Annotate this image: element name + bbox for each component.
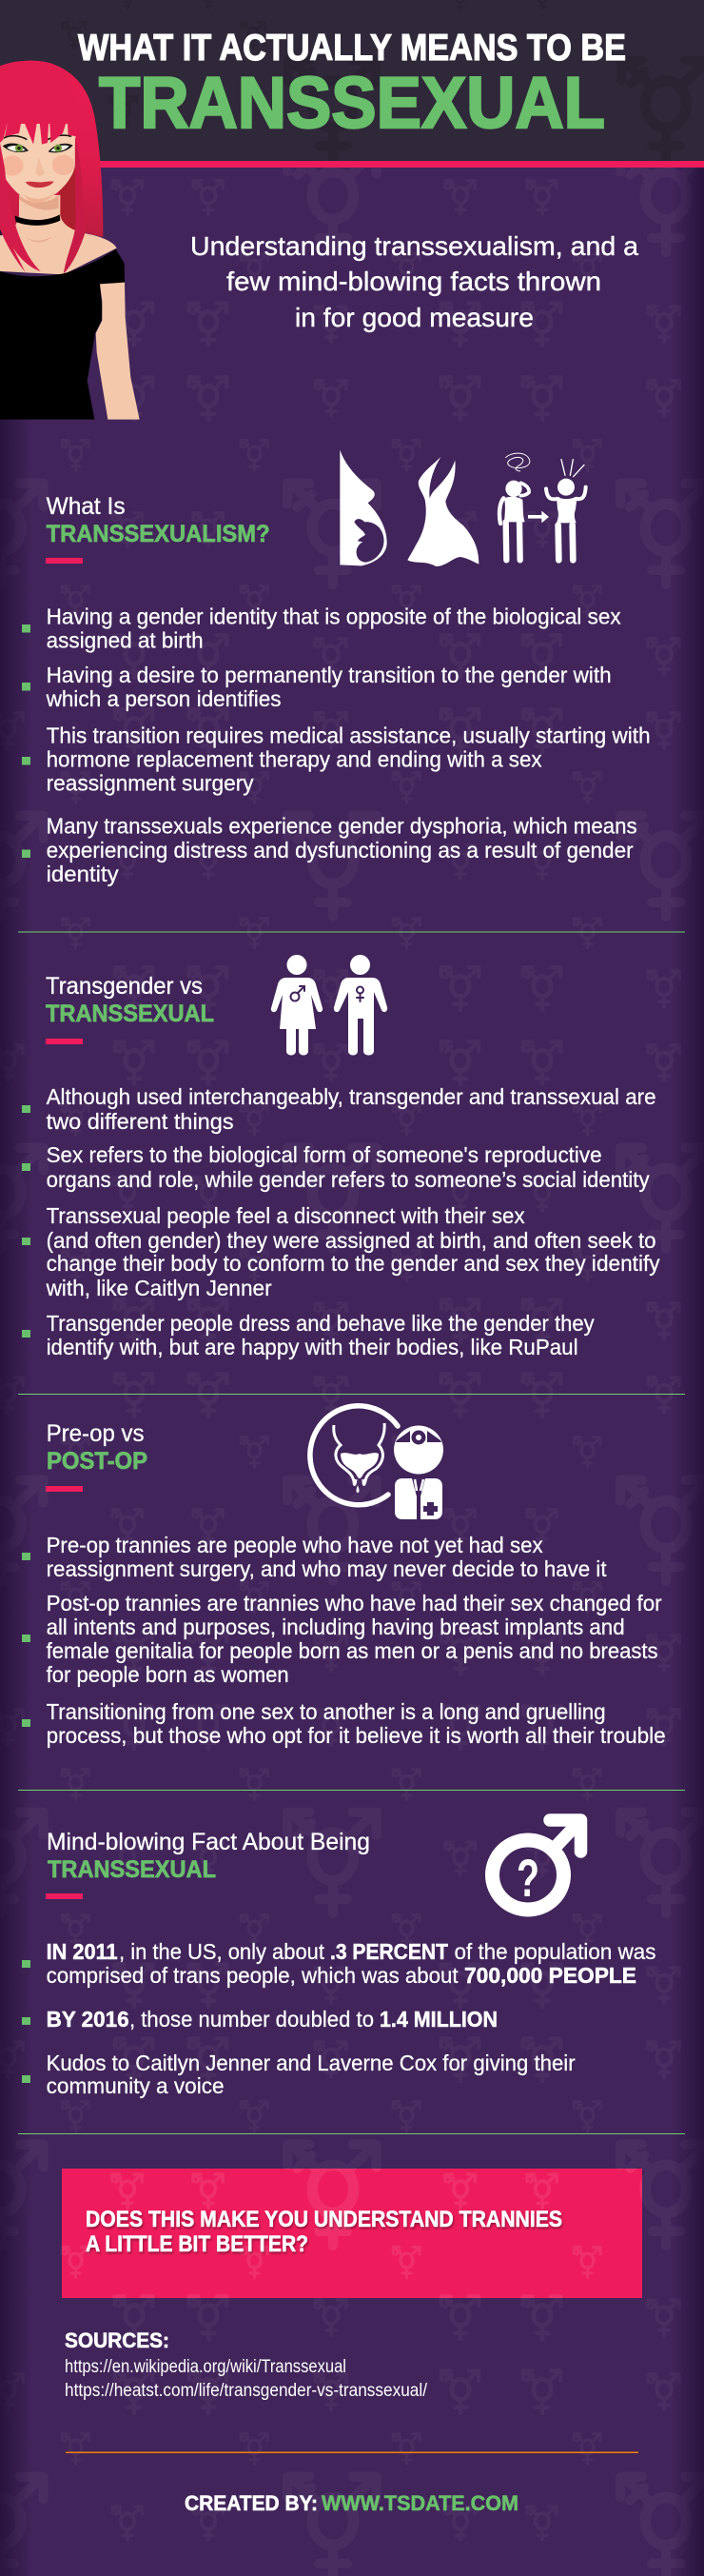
- heading: TRANSSEXUAL: [48, 1856, 216, 1883]
- heading: POST-OP: [47, 1448, 147, 1475]
- sources: https://en.wikipedia.org/wiki/Transsexual: [65, 2357, 346, 2377]
- heading: Mind-blowing Fact About Being: [47, 1829, 370, 1855]
- header band: [0, 0, 704, 168]
- bullet 4: Transgender people dress and behave like the gender they: [47, 1311, 595, 1336]
- icon: bladder and doctor: [310, 1406, 443, 1519]
- bullet 2: for people born as women: [47, 1662, 289, 1687]
- panel: what is transsexualism: [22, 450, 651, 886]
- bullet 3: (and often gender) they were assigned at birth, and often seek to: [47, 1228, 656, 1253]
- bullet 2: female genitalia for people born as men or a penis and no breasts: [47, 1638, 658, 1663]
- bullet 3: change their body to conform to the gender and sex they identify: [47, 1251, 660, 1276]
- bullet 2: Post-op trannies are trannies who have had their sex changed for: [47, 1591, 662, 1615]
- bullet 1: Although used interchangeably, transgender and transsexual are: [47, 1084, 656, 1109]
- bullet 1: comprised of trans people, which was about: [47, 1963, 459, 1988]
- bullet 2: Sex refers to the biological form of someone's reproductive: [47, 1142, 602, 1167]
- subtitle: [190, 231, 638, 332]
- bullet 1: , in the US, only about: [119, 1939, 325, 1964]
- sources: https://heatst.com/life/transgender-vs-transsexual/: [65, 2381, 428, 2401]
- subtitle: few mind-blowing facts thrown: [226, 267, 601, 296]
- bullet 1: two different things: [47, 1109, 234, 1134]
- bullet 1: [22, 1533, 607, 1581]
- bullet 3: [22, 1203, 660, 1300]
- bullet 3: [22, 723, 651, 796]
- bullet 4: [22, 814, 637, 886]
- bullet 2: Having a desire to permanently transition to the gender with: [47, 663, 612, 687]
- bullet 4: identity: [47, 862, 119, 886]
- bullet 3: process, but those who opt for it believe it is worth all their trouble: [47, 1723, 666, 1748]
- bullet 4: Many transsexuals experience gender dysphoria, which means: [47, 814, 637, 839]
- bullet 2: 1.4 MILLION: [380, 2007, 498, 2031]
- bullet 1: reassignment surgery, and who may never decide to have it: [47, 1556, 607, 1581]
- panel: transgender vs transsexual: [22, 955, 660, 1359]
- sources: [65, 2328, 428, 2401]
- bullet 3: with, like Caitlyn Jenner: [46, 1276, 272, 1300]
- heading: Pre-op vs: [47, 1420, 145, 1447]
- heading: TRANSSEXUALISM?: [47, 521, 270, 547]
- bullet 1: of the population was: [455, 1939, 656, 1964]
- icon: pregnant silhouette, dress, confused people: [340, 450, 586, 566]
- sources: SOURCES:: [65, 2328, 169, 2352]
- callout: DOES THIS MAKE YOU UNDERSTAND TRANNIES: [86, 2207, 562, 2232]
- bullet 2: all intents and purposes, including having breast implants and: [47, 1615, 625, 1639]
- icon: woman and man figures: [271, 955, 387, 1055]
- bullet 1: IN 2011: [47, 1939, 118, 1964]
- heading: TRANSSEXUAL: [46, 1001, 214, 1027]
- title: WHAT IT ACTUALLY MEANS TO BE: [78, 28, 626, 69]
- credit line: CREATED BY:: [185, 2491, 318, 2515]
- heading: [46, 1420, 147, 1492]
- icon: male symbol with question mark: [493, 1820, 580, 1910]
- bullet 1: [22, 1084, 656, 1134]
- bullet 2: organs and role, while gender refers to someone’s social identity: [47, 1167, 650, 1192]
- bullet 3: reassignment surgery: [47, 771, 254, 796]
- subtitle: Understanding transsexualism, and a: [190, 231, 638, 261]
- bullet 2: [22, 2007, 498, 2031]
- callout: [62, 2169, 642, 2298]
- credit line: WWW.TSDATE.COM: [322, 2491, 518, 2515]
- bullet 2: , those number doubled to: [129, 2007, 374, 2031]
- heading: What Is: [47, 493, 126, 520]
- icon: male symbol with question mark: ?: [517, 1848, 539, 1908]
- bullet 2: BY 2016: [47, 2007, 129, 2031]
- callout: A LITTLE BIT BETTER?: [86, 2231, 308, 2257]
- bullet 1: [22, 604, 621, 653]
- panel: mind-blowing fact: [22, 1820, 656, 2098]
- bullet 1: Pre-op trannies are people who have not yet had sex: [47, 1533, 543, 1557]
- bullet 3: [22, 2051, 576, 2098]
- bullet 1: Having a gender identity that is opposite of the biological sex: [47, 604, 621, 629]
- bullet 2: [22, 1142, 650, 1192]
- bullet 1: assigned at birth: [47, 628, 204, 653]
- bullet 1: 700,000 PEOPLE: [464, 1963, 636, 1988]
- heading: [46, 1829, 370, 1899]
- bullet 2: which a person identifies: [46, 686, 282, 711]
- bullet 2: [22, 663, 612, 711]
- bullet 3: Transitioning from one sex to another is a long and gruelling: [47, 1699, 606, 1724]
- bullet 3: community a voice: [47, 2073, 225, 2098]
- bullet 2: [22, 1591, 662, 1687]
- panel: pre-op vs post-op: [22, 1406, 666, 1748]
- credit line: [185, 2491, 518, 2515]
- title: TRANSSEXUAL: [99, 63, 605, 144]
- heading: Transgender vs: [46, 973, 203, 1000]
- bullet 3: Kudos to Caitlyn Jenner and Laverne Cox for giving their: [47, 2051, 576, 2075]
- bullet 3: This transition requires medical assistance, usually starting with: [47, 723, 651, 748]
- bullet 3: [22, 1699, 666, 1748]
- illustration: red-haired woman: [0, 61, 140, 420]
- heading: [46, 973, 214, 1044]
- bullet 1: [22, 1939, 656, 1988]
- bullet 3: hormone replacement therapy and ending with a sex: [47, 747, 542, 772]
- title: [78, 28, 626, 144]
- bullet 4: [22, 1311, 595, 1359]
- bullet 4: experiencing distress and dysfunctioning as a result of gender: [47, 838, 634, 862]
- bullet 4: identify with, but are happy with their bodies, like RuPaul: [47, 1335, 578, 1359]
- bullet 1: .3 PERCENT: [330, 1939, 448, 1964]
- bullet 3: Transsexual people feel a disconnect with their sex: [47, 1203, 525, 1228]
- heading: [46, 493, 270, 564]
- subtitle: in for good measure: [295, 303, 534, 332]
